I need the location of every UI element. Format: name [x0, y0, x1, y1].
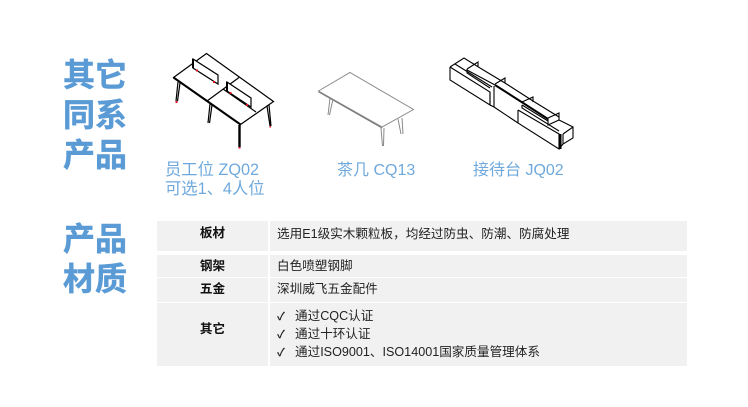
heading: other products in series	[63, 57, 127, 173]
caption: workstation ZQ02: 员工位 ZQ02	[165, 161, 259, 179]
table row: hardware	[157, 278, 687, 302]
value: certification list	[277, 309, 540, 359]
icon: coffee table CQ13	[318, 72, 414, 146]
icon: reception desk JQ02	[449, 57, 574, 150]
heading: other products in series: 产品	[63, 137, 127, 173]
heading: other products in series: 同系	[63, 97, 127, 133]
value: hardware: 深圳威飞五金配件	[277, 282, 378, 296]
value: certification list: 通过ISO9001、ISO14001国家质量管理体系	[295, 345, 540, 359]
table row: board	[157, 221, 687, 251]
caption: workstation ZQ02	[165, 160, 265, 198]
heading: other products in series: 其它	[63, 57, 127, 93]
heading: product materials: 产品	[63, 220, 127, 256]
table row: other	[157, 303, 687, 366]
caption: workstation ZQ02: 可选1、4人位	[165, 180, 265, 198]
caption: coffee table CQ13: 茶几 CQ13	[337, 162, 415, 179]
value: certification list: ✓	[277, 347, 285, 359]
label: steel frame: 钢架	[200, 259, 225, 273]
label: board: 板材	[200, 226, 225, 240]
label: other: 其它	[200, 322, 225, 336]
icon: workstation desk ZQ02	[172, 52, 274, 148]
value: board: 选用E1级实木颗粒板，均经过防虫、防潮、防腐处理	[277, 227, 569, 241]
heading: product materials: 材质	[63, 260, 127, 296]
label: hardware: 五金	[200, 282, 225, 296]
table row: steel frame	[157, 255, 687, 277]
value: certification list: ✓	[277, 311, 285, 323]
caption: reception desk JQ02: 接待台 JQ02	[473, 162, 564, 179]
value: steel frame: 白色喷塑钢脚	[277, 259, 353, 273]
value: certification list: 通过CQC认证	[295, 309, 373, 323]
heading: product materials	[63, 220, 127, 296]
value: certification list: 通过十环认证	[295, 327, 371, 341]
value: certification list: ✓	[277, 329, 285, 341]
